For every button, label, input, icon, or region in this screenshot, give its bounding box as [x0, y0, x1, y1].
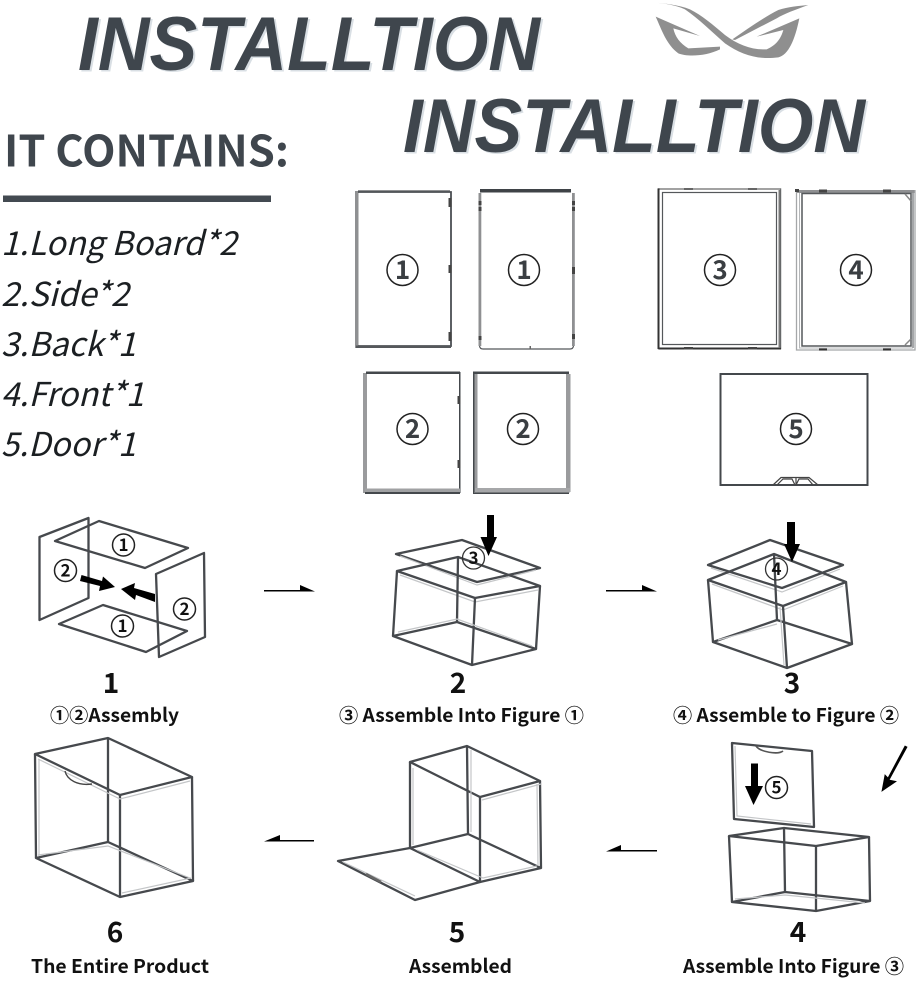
panel: door 5: 5 — [788, 409, 804, 446]
step 6 diagram — [35, 738, 193, 897]
step 3 label — [673, 662, 899, 728]
arrow: down onto back panel — [480, 515, 497, 556]
step 4 diagram: 5 — [771, 774, 782, 798]
box without door — [729, 828, 870, 911]
step 3 label: ④ Assemble to Figure ② — [673, 701, 899, 728]
step 3 diagram — [708, 522, 852, 668]
step 1 diagram — [40, 518, 205, 657]
step 4 label: Assemble Into Figure ③ — [682, 952, 904, 979]
arrow: left pointing — [121, 583, 155, 602]
step 5 label: 5 — [449, 911, 465, 951]
step 3 diagram: 4 — [771, 555, 782, 580]
arrow: step 4 to 5 — [606, 845, 657, 852]
step 1 diagram: 2 — [60, 556, 71, 582]
title: second: INSTALLTION — [403, 84, 867, 169]
step 4 label — [682, 911, 904, 979]
parts list: 3.Back*1 — [1, 318, 136, 366]
panel: side 2 left: 2 — [405, 409, 420, 446]
panel: door 5 — [720, 374, 868, 485]
panel: back 3 — [658, 188, 781, 350]
parts list: 4.Front*1 — [1, 368, 144, 416]
panel: front 4 — [795, 189, 915, 350]
heading: it contains: IT CONTAINS: — [4, 118, 289, 180]
step 6 label: The Entire Product — [31, 952, 209, 979]
title: first: INSTALLTION — [78, 2, 542, 87]
heading underline — [3, 196, 271, 202]
arrow: step 2 to 3 — [606, 585, 657, 592]
panel: side 2 right: 2 — [515, 409, 531, 446]
step 6 label: 6 — [107, 911, 123, 951]
step 2 diagram: 3 — [468, 544, 479, 569]
arrow: diagonal step 3 to 4 — [882, 746, 907, 791]
step 5 label: Assembled — [408, 952, 512, 979]
step 4 label: 4 — [790, 911, 806, 951]
step 1 label: 1 — [103, 662, 119, 702]
panel: side 2 right — [473, 372, 570, 494]
arrow: step 5 to 6 — [264, 835, 314, 842]
arrow: down onto front panel — [784, 522, 800, 562]
step 1 diagram: 1 — [118, 531, 129, 556]
parts list: 2.Side*2 — [1, 268, 132, 316]
panel: long board 1 right — [478, 189, 575, 349]
step 1 label: ①②Assembly — [50, 701, 179, 728]
step 2 label: 2 — [450, 662, 466, 702]
step 1 diagram: 2 — [179, 595, 190, 620]
panel: long board 1 left: 1 — [395, 250, 410, 287]
logo: mask emblem — [653, 3, 808, 58]
panel: long board 1 right: 1 — [516, 250, 532, 287]
door being lowered — [732, 743, 814, 827]
parts list: 1.Long Board*2 — [1, 217, 240, 265]
panel: back 3: 3 — [712, 250, 728, 287]
step 5 label — [408, 911, 512, 979]
step 2 label — [339, 662, 584, 728]
step 1 label — [50, 662, 179, 728]
panel: side 2 left — [363, 372, 460, 494]
step 1 diagram: 1 — [117, 612, 128, 637]
step 2 diagram — [393, 515, 540, 665]
step 6 label — [31, 911, 209, 979]
parts list — [1, 217, 240, 466]
panel: long board 1 left — [355, 190, 452, 348]
arrow: right pointing — [80, 575, 115, 591]
panel: front 4: 4 — [848, 250, 864, 287]
arrow: door downward — [745, 764, 763, 805]
step 2 label: ③ Assemble Into Figure ① — [339, 701, 584, 728]
step 5 diagram — [338, 746, 541, 900]
title: second: INSTALLTION — [405, 86, 869, 170]
step 4 diagram — [729, 743, 870, 911]
arrow: step 1 to 2 — [264, 585, 315, 592]
title: first: INSTALLTION — [80, 4, 544, 88]
step 3 label: 3 — [784, 662, 800, 702]
parts list: 5.Door*1 — [1, 418, 136, 466]
